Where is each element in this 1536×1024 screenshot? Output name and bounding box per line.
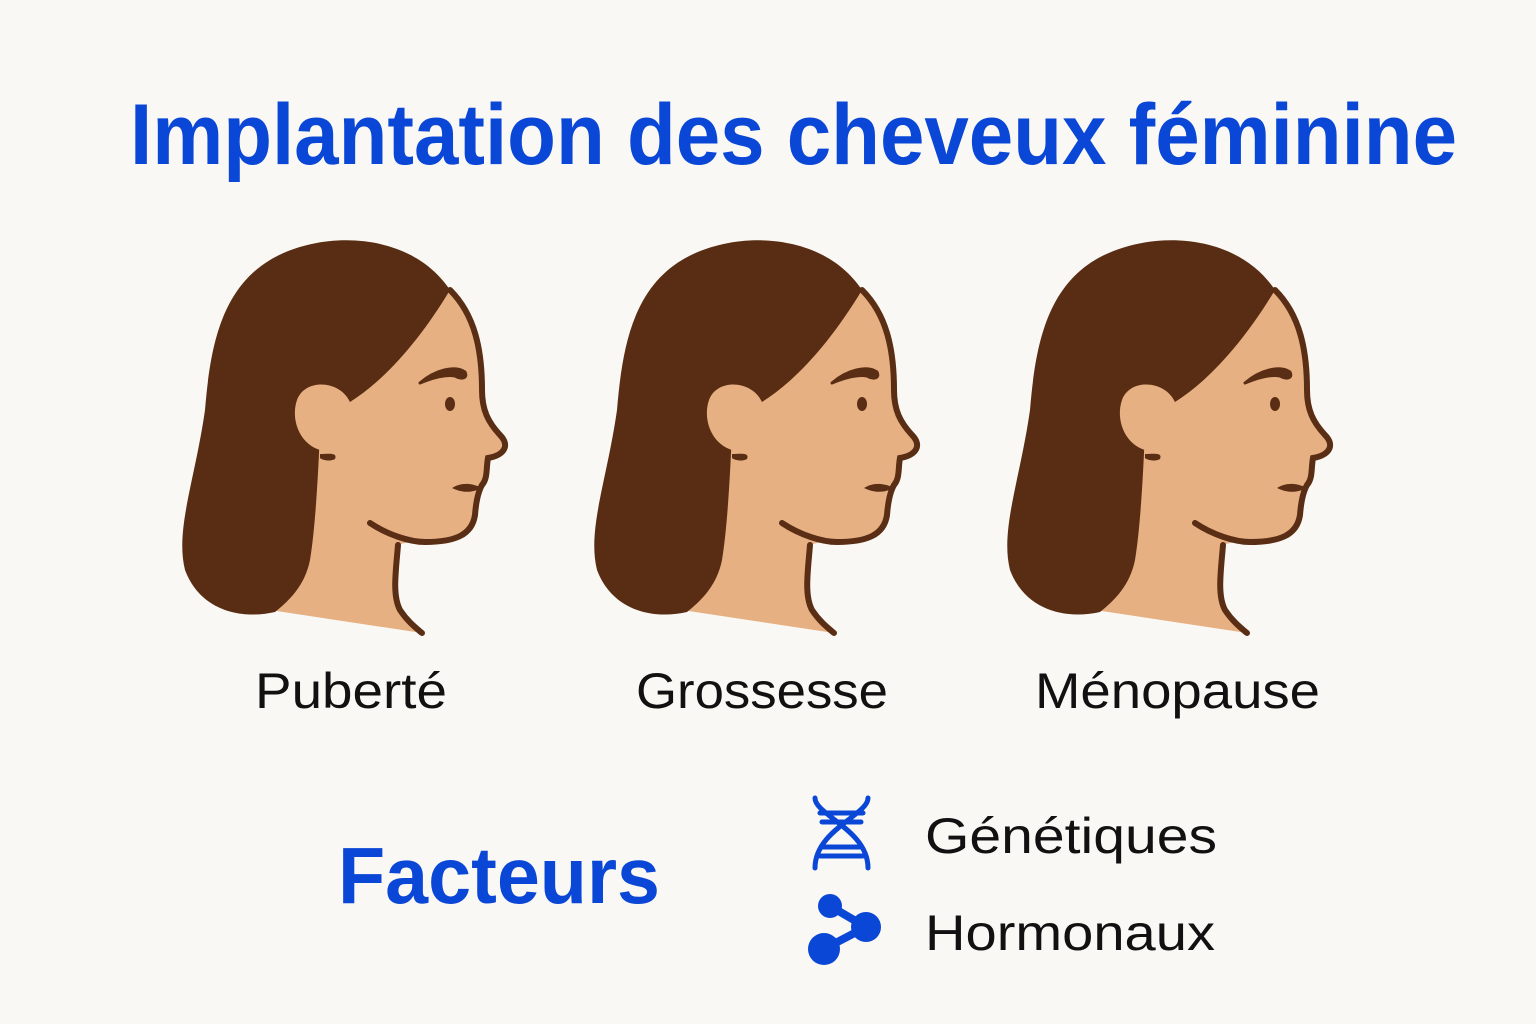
label: grossesse: Grossesse (636, 663, 888, 719)
title: Implantation des cheveux féminine (130, 87, 1457, 183)
head: ménopause (1007, 240, 1330, 633)
icon: hormone molecule (808, 894, 881, 965)
heading: facteurs: Facteurs (338, 831, 660, 920)
label: ménopause: Ménopause (1035, 663, 1320, 719)
factor: hormonaux: Hormonaux (925, 905, 1215, 961)
icon: dna (815, 798, 868, 868)
head: puberté (182, 240, 505, 633)
label: puberté: Puberté (255, 663, 447, 719)
head: grossesse (594, 240, 917, 633)
factor: génétiques: Génétiques (925, 808, 1217, 864)
